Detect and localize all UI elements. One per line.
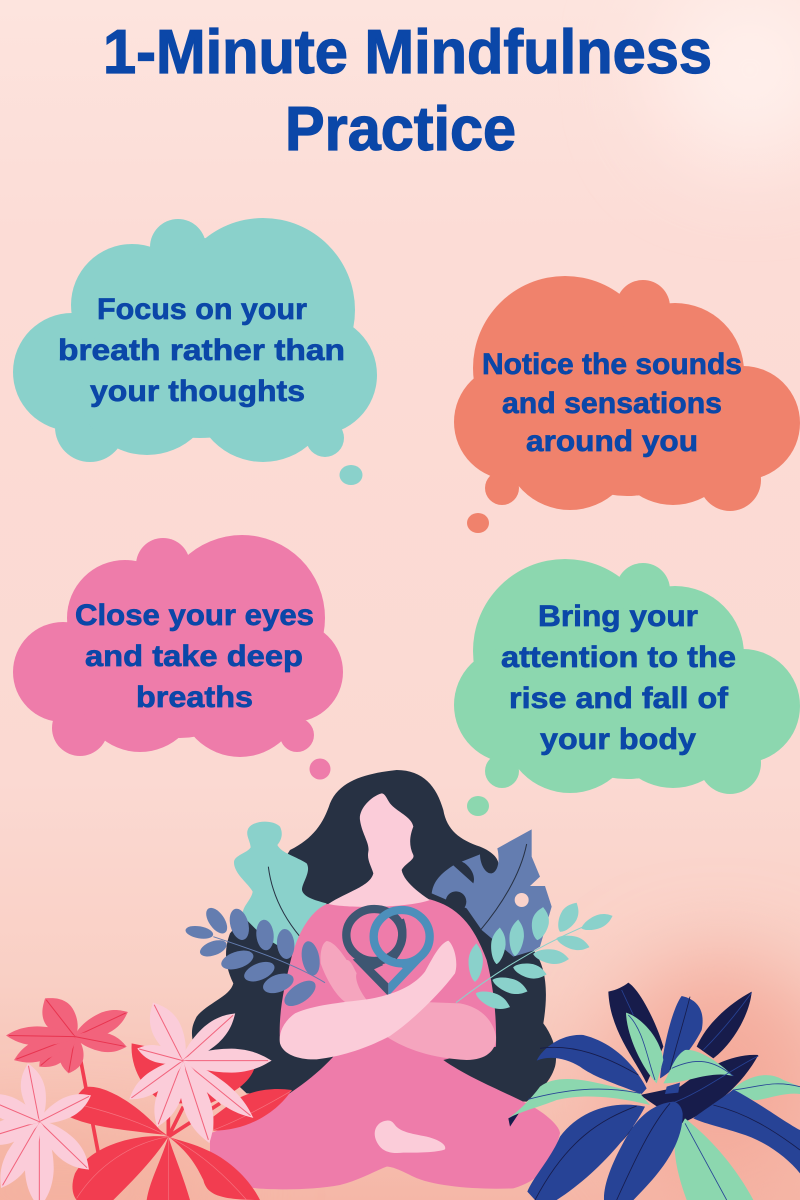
thought bubble: pink (310, 758, 330, 780)
branch: blue leaves (185, 904, 325, 1011)
cloud shape: teal (13, 218, 377, 462)
blue leaves (527, 996, 800, 1200)
dark pink leaf cluster (6, 989, 132, 1076)
cloud shape: green (454, 559, 800, 794)
red leaf veins (77, 1091, 292, 1200)
foot (375, 1121, 445, 1153)
cloud shape: coral (454, 276, 800, 511)
text: notice sounds: and sensations (502, 387, 722, 420)
light pink leaf cluster: left (0, 1061, 97, 1200)
text: rise and fall: rise and fall of (509, 682, 729, 715)
stems (80, 1057, 220, 1153)
shirt and lap (210, 899, 560, 1189)
near arm (280, 941, 456, 1059)
thought bubble: teal (340, 465, 362, 485)
far arm (321, 941, 496, 1060)
title: 1-Minute Mindfulness (103, 18, 712, 87)
branch: teal leaves (456, 899, 615, 1014)
panel: pink thought cloud (13, 535, 343, 780)
text: rise and fall: Bring your (538, 600, 698, 633)
plant: red and pink foliage (0, 989, 292, 1200)
text: focus on breath: your thoughts (90, 375, 305, 408)
neck and head (328, 793, 430, 907)
text: rise and fall: your body (540, 723, 696, 756)
text: focus on breath: breath rather than (58, 334, 345, 367)
text: notice sounds (482, 348, 742, 458)
text: close your eyes: Close your eyes (75, 599, 314, 632)
title (103, 18, 712, 164)
hair (192, 770, 556, 1102)
text: notice sounds: around you (526, 425, 698, 458)
text: close your eyes (75, 599, 314, 714)
green back leaves (508, 1075, 800, 1200)
cloud shape: pink (13, 535, 343, 757)
title: Practice (285, 95, 516, 164)
panel: teal thought cloud (13, 218, 377, 485)
red leaves (66, 1043, 292, 1200)
illustration: meditating woman (185, 770, 615, 1189)
green front leaves (626, 1013, 733, 1083)
thought bubble: green (467, 796, 489, 816)
light pink leaf cluster: right (123, 996, 272, 1147)
panel: coral thought cloud (454, 276, 800, 533)
text: notice sounds: Notice the sounds (482, 348, 742, 381)
leaf veins (528, 990, 800, 1200)
leaf: teal back leaf (234, 822, 327, 955)
text: focus on breath (58, 293, 345, 408)
text: focus on breath: Focus on your (97, 293, 307, 326)
thought bubble: coral (467, 513, 489, 533)
dark navy leaves (508, 983, 758, 1200)
text: close your eyes: and take deep (85, 640, 303, 673)
plant: blue and green foliage (508, 983, 800, 1200)
panel: green thought cloud (454, 559, 800, 816)
text: rise and fall (501, 600, 736, 756)
leaf: monstera (432, 829, 552, 957)
text: rise and fall: attention to the (501, 641, 736, 674)
text: close your eyes: breaths (136, 681, 253, 714)
logo: interlocking rings heart (346, 909, 430, 996)
